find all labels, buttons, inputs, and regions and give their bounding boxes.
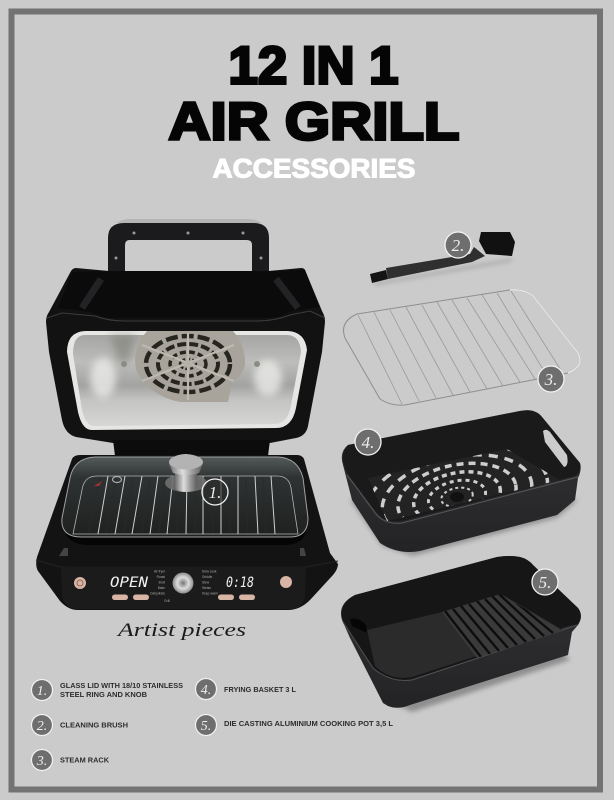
open lid body — [46, 268, 325, 443]
base body — [36, 455, 338, 610]
handle — [108, 223, 269, 272]
legend item 2: CLEANING BRUSH — [60, 720, 128, 730]
legend item 4: 4. — [201, 683, 211, 698]
control panel: Slow cook — [202, 570, 217, 574]
badge 1: 1. — [209, 483, 221, 502]
control panel: Griddle — [202, 575, 213, 579]
legend item 5 — [196, 714, 393, 736]
legend item 1: 1. — [37, 684, 47, 699]
accessory: cleaning brush — [370, 232, 515, 284]
badge 5: 5. — [539, 573, 551, 592]
legend item 1: STEEL RING AND KNOB — [60, 690, 147, 699]
control panel: Stew — [202, 580, 210, 584]
fan cover — [135, 330, 245, 402]
control panel — [74, 570, 292, 603]
badge 4: 4. — [362, 433, 374, 452]
legend item 5: DIE CASTING ALUMINIUM COOKING POT 3,5 L — [224, 719, 393, 728]
main product: air grill — [36, 219, 338, 610]
title: 12 IN 1 — [228, 36, 398, 96]
legend item 3 — [32, 750, 109, 770]
control panel: Keep warm — [202, 592, 218, 596]
subtitle: ACCESSORIES — [212, 154, 416, 184]
title: AIR GRILL — [168, 92, 460, 152]
legend item 5: 5. — [201, 719, 211, 734]
legend item 4: FRYING BASKET 3 L — [224, 685, 296, 694]
base lower panel — [61, 566, 306, 609]
control panel: OPEN — [110, 575, 149, 591]
legend item 1 — [32, 680, 183, 700]
control panel: Bake — [158, 586, 165, 590]
control panel: Dehydrate — [150, 592, 165, 596]
title — [168, 36, 460, 152]
badge 4 — [355, 429, 381, 455]
legend item 4 — [196, 678, 296, 700]
lid inner hood — [58, 270, 319, 318]
control panel: Roast — [157, 575, 165, 579]
accessory: frying basket — [342, 410, 581, 563]
legend — [32, 678, 393, 770]
badge 2: 2. — [452, 236, 464, 255]
badge 1 — [202, 479, 228, 505]
badge 5 — [532, 569, 558, 595]
badge 3 — [538, 366, 564, 392]
legend item 3: 3. — [36, 754, 47, 769]
control panel: Broil — [159, 580, 165, 584]
legend item 2 — [32, 714, 128, 736]
legend item 1: GLASS LID WITH 18/10 STAINLESS — [60, 681, 183, 690]
control panel: Grill — [164, 599, 170, 603]
accessory: steam rack — [344, 290, 580, 405]
glass lid with rack — [62, 454, 308, 545]
accessory: cooking pot — [341, 556, 581, 712]
hinge — [113, 440, 270, 456]
legend item 2: 2. — [37, 719, 47, 734]
basket handle slot — [543, 430, 568, 467]
hinge blocks — [59, 548, 306, 556]
badge 3: 3. — [544, 370, 557, 389]
badge 2 — [445, 232, 471, 258]
control panel: Air fryer — [154, 570, 166, 574]
pot ridges — [442, 594, 563, 658]
signature: Artist pieces — [115, 620, 246, 641]
legend item 3: STEAM RACK — [60, 756, 109, 764]
steel cavity — [67, 331, 307, 430]
control panel: Steam — [202, 586, 212, 590]
basket holes — [372, 449, 550, 521]
knob — [165, 454, 207, 492]
control panel: 0:18 — [226, 575, 254, 591]
